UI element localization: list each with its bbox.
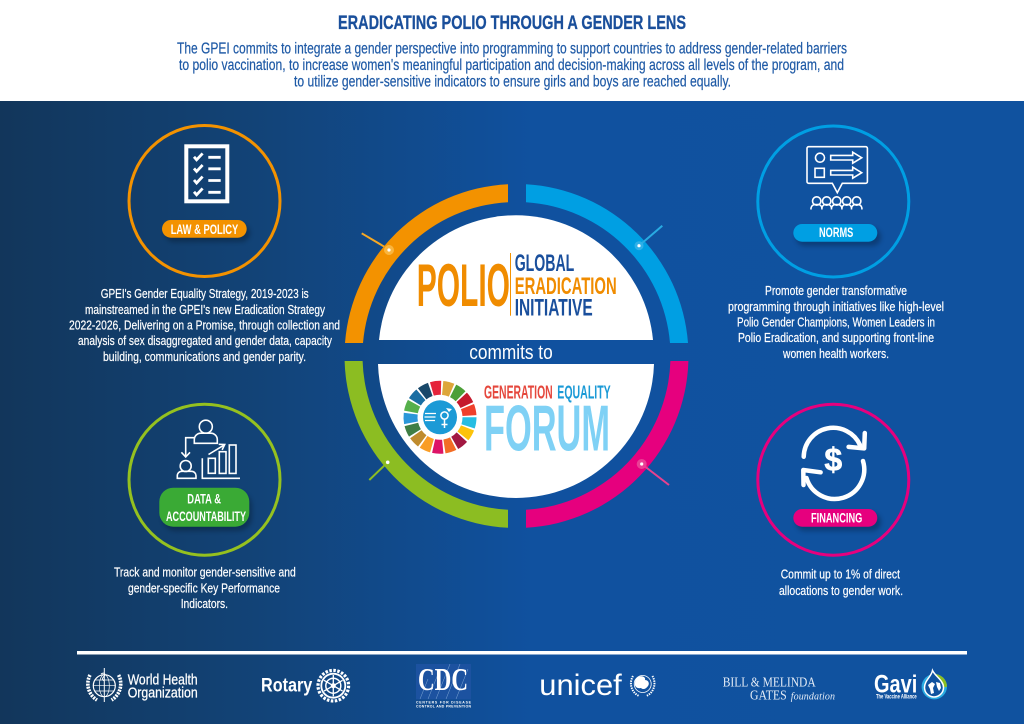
label pill: [162, 220, 250, 242]
logo: Gavi: [874, 670, 947, 701]
label pill: ACCOUNTABILITY: [166, 509, 246, 524]
label pill: FINANCING: [811, 510, 862, 525]
logo: generation equality forum wordmark: GENERATION: [484, 381, 553, 402]
label pill: DATA &: [187, 491, 221, 506]
panel: financing: [758, 404, 909, 598]
description: Track and monitor gender-sensitive and: [114, 564, 296, 580]
circle outline: [129, 126, 280, 276]
icon: checklist document: [186, 146, 227, 201]
label pill: [793, 224, 881, 246]
logo: polio global eradication initiative: POLIO: [417, 252, 510, 319]
description: [114, 564, 296, 611]
description: 2022-2026, Delivering on a Promise, through collection and: [69, 318, 340, 332]
logo: unicef: unicef: [539, 669, 622, 702]
logo: WHO: World Health: [128, 672, 198, 688]
description: allocations to gender work.: [779, 583, 903, 598]
icon: circular dollar arrows: [803, 428, 865, 499]
logo: CDC: CENTERS FOR DISEASE: [416, 700, 472, 704]
description: gender-specific Key Performance: [128, 580, 280, 596]
connector: green: [369, 460, 390, 480]
description: building, communications and gender parity.: [103, 349, 306, 364]
logo: Bill and Melinda Gates Foundation: GATES: [750, 687, 787, 702]
label pill: [159, 488, 252, 531]
logo: Bill and Melinda Gates Foundation: BILL & MELINDA: [723, 675, 816, 690]
connector: pink: [637, 459, 669, 485]
panel: norms: [728, 126, 944, 361]
circle outline: [129, 404, 280, 555]
footer divider: [77, 651, 967, 654]
lower white half circle: [378, 364, 654, 498]
connector: orange: [362, 233, 394, 255]
icon: people and bar chart: [177, 420, 240, 478]
label pill: NORMS: [819, 225, 853, 240]
logo: polio global eradication initiative: ERADICATION: [515, 273, 617, 300]
footer logos: [88, 661, 947, 708]
logo: CDC: CDC: [418, 661, 468, 697]
logo: Bill and Melinda Gates Foundation: [723, 675, 835, 702]
label pill: LAW & POLICY: [171, 222, 238, 237]
logo: Gavi: The Vaccine Alliance: [876, 695, 917, 701]
logo: generation equality forum wordmark: FORUM: [484, 392, 610, 465]
header: [177, 12, 847, 90]
intro text: to polio vaccination, to increase women's meaningful participation and decision-making across all levels of the program, and: [179, 57, 844, 74]
logo: generation equality forum wordmark: EQUALITY: [557, 381, 611, 402]
description: Indicators.: [181, 596, 228, 611]
description: analysis of sex disaggregated and gender data, capacity: [78, 333, 332, 348]
title: ERADICATING POLIO THROUGH A GENDER LENS: [338, 12, 686, 34]
intro text: [177, 40, 847, 90]
logo: polio global eradication initiative: GLOBAL: [515, 250, 574, 277]
description: women health workers.: [782, 346, 889, 361]
intro text: to utilize gender-sensitive indicators to ensure girls and boys are reached equally.: [294, 74, 731, 90]
icon: circular dollar arrows: $: [824, 442, 842, 478]
panel: law and policy: [69, 126, 340, 364]
upper white half circle: [379, 215, 653, 340]
description: GPEI's Gender Equality Strategy, 2019-2023 is: [101, 286, 309, 301]
logo: Gavi: Gavi: [874, 670, 917, 698]
logo: unicef: [539, 669, 654, 702]
arc: blue: [526, 184, 688, 343]
logo: generation equality forum wheel: [398, 376, 482, 459]
logo: polio global eradication initiative: INITIATIVE: [515, 295, 593, 322]
description: Commit up to 1% of direct: [781, 566, 900, 582]
description: Polio Gender Champions, Women Leaders in: [737, 314, 935, 330]
icon: speech bubble with audience: [807, 147, 867, 210]
description: [69, 286, 340, 364]
description: [728, 283, 944, 361]
label pill: [793, 509, 881, 531]
logo: CDC: CONTROL AND PREVENTION: [416, 704, 471, 708]
description: mainstreamed in the GPEI's new Eradication Strategy: [85, 302, 325, 317]
arc: green: [345, 361, 508, 528]
panel: data and accountability: [114, 404, 296, 611]
logo: generation equality forum wordmark: [484, 381, 611, 465]
logo: WHO: Organization: [128, 685, 198, 701]
intro text: The GPEI commits to integrate a gender perspective into programming to support countries to address gender-related barriers: [177, 40, 847, 58]
arc: orange: [345, 184, 508, 343]
description: [779, 566, 903, 598]
description: programming through initiatives like high-level: [728, 299, 944, 314]
logo: WHO: [88, 668, 198, 702]
description: Promote gender transformative: [765, 283, 907, 298]
description: Polio Eradication, and supporting front-line: [738, 330, 934, 345]
logo: Rotary: Rotary: [261, 676, 313, 697]
central ring diagram: [345, 184, 688, 528]
circle outline: [758, 126, 909, 277]
logo: Rotary: [261, 670, 349, 701]
connector: blue: [634, 226, 662, 250]
commits to label: commits to: [469, 342, 553, 364]
arc: pink: [526, 361, 688, 528]
circle outline: [758, 404, 909, 555]
logo: CDC: [416, 661, 472, 708]
logo: Bill and Melinda Gates Foundation: foundation: [791, 691, 835, 702]
